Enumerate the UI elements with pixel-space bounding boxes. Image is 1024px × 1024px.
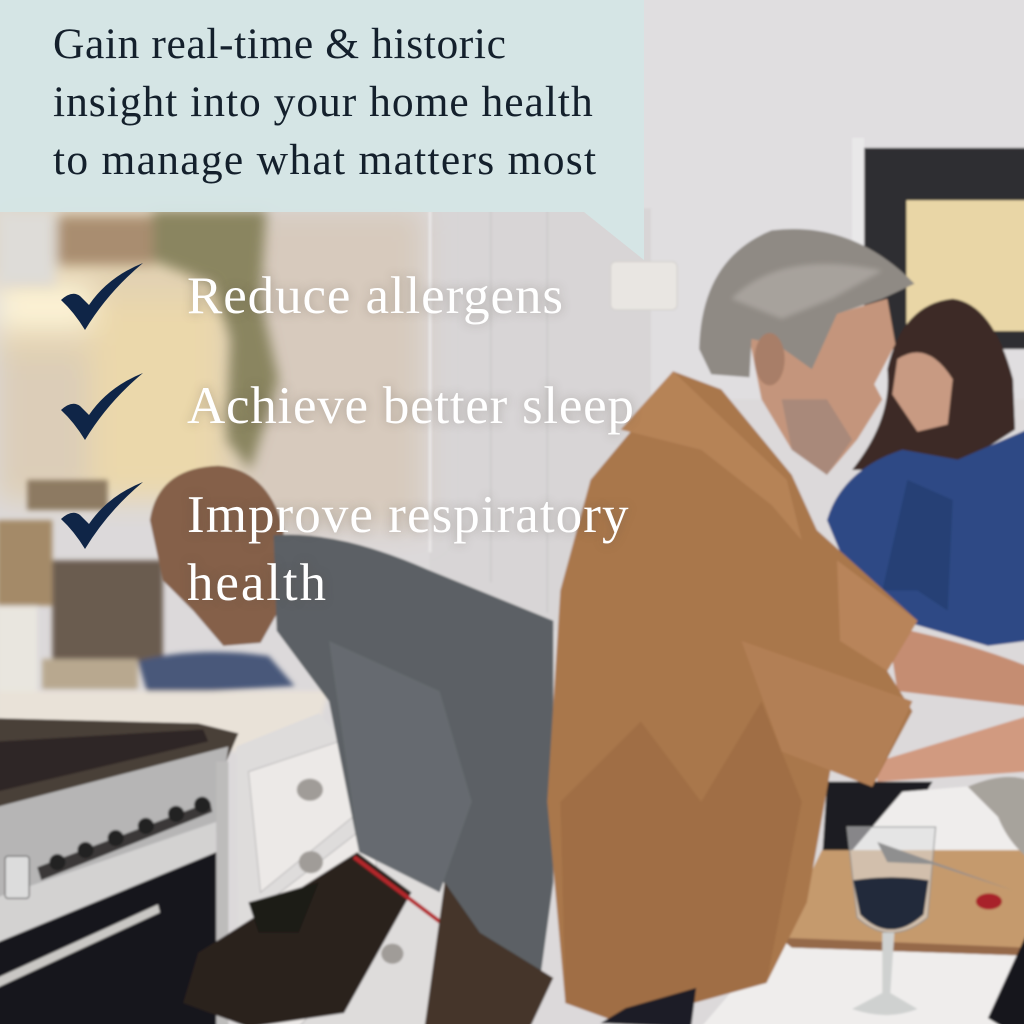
label: Improve respiratory	[187, 486, 630, 544]
person: man bending at the oven	[150, 466, 553, 1024]
heading text	[53, 20, 597, 184]
label	[187, 486, 630, 612]
check mark	[61, 482, 143, 549]
label: Reduce allergens	[187, 267, 564, 325]
face	[749, 299, 895, 475]
cabinets	[236, 713, 450, 1024]
list item: better sleep	[61, 373, 636, 440]
window frame	[852, 138, 1024, 379]
heading text: to manage what matters most	[53, 136, 597, 184]
person: woman in blue blouse	[822, 299, 1024, 872]
label: health	[187, 554, 328, 612]
tablet corner	[988, 933, 1024, 1024]
counter with coffee machine	[0, 480, 329, 752]
label: Achieve better sleep	[187, 377, 635, 435]
list item: reduce allergens	[61, 263, 564, 330]
list item: respiratory health	[61, 482, 630, 612]
heading text: insight into your home health	[53, 78, 594, 126]
check mark	[61, 373, 143, 440]
person: man in tan shirt	[547, 229, 1024, 1024]
check mark	[61, 263, 143, 330]
counter and cutting board	[701, 782, 1024, 1024]
wine glass and bowl	[847, 777, 1024, 1015]
heading text: Gain real-time & historic	[53, 20, 506, 68]
hair	[699, 229, 914, 377]
stove and oven	[0, 718, 238, 1024]
hanging plant and shelf	[0, 210, 279, 470]
wall sensor device	[611, 262, 677, 310]
